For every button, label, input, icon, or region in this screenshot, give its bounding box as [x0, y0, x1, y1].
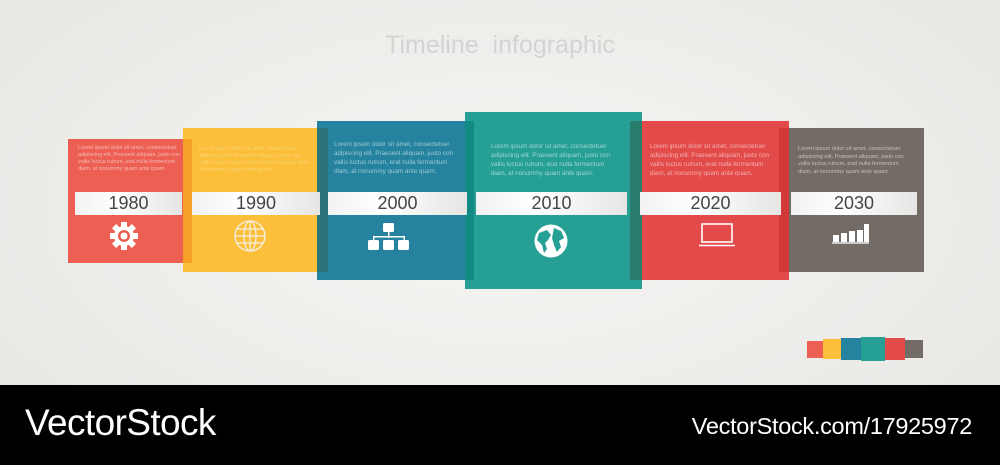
panel: 2020: [630, 121, 789, 280]
year: 1990: 1990: [236, 193, 276, 213]
legend swatches: [807, 337, 923, 361]
text: 1990: Lorem ipsum dolor sit amet, consectetuer adipiscing elit. Praesent aliquam, justo con vallis luctus rutrum, erat nulla fermentum diam, at nonummy quam ante quam.: [199, 146, 311, 173]
year: 2010: 2010: [531, 193, 572, 213]
text: 2030: Lorem ipsum dolor sit amet, consectetuer adipiscing elit. Praesent aliquam, justo con vallis luctus rutrum, erat nulla fermentum diam, at nonummy quam ante quam.: [798, 146, 904, 175]
icon: globe wire: [234, 220, 266, 252]
footer logo: VectorStock: [25, 402, 216, 443]
icon: gear: [110, 222, 138, 250]
icon: earth: [534, 224, 568, 258]
panel: 2010: [465, 112, 642, 289]
text: 2020: Lorem ipsum dolor sit amet, consectetuer adipiscing elit. Praesent aliquam, justo con vallis luctus rutrum, erat nulla fermentum diam, at nonummy quam ante quam.: [650, 143, 769, 177]
overlap strip: [317, 128, 328, 272]
footer bar: [0, 385, 1000, 465]
panel: 2000: [317, 121, 474, 280]
year: 1990: [192, 192, 320, 215]
panel: 1980: [68, 139, 192, 263]
text: 2000: Lorem ipsum dolor sit amet, consectetuer adipiscing elit. Praesent aliquam, justo con vallis luctus rutrum, erat nulla fermentum diam, at nonummy quam ante quam.: [334, 141, 453, 175]
year: 2010: [476, 192, 627, 215]
year: 2000: 2000: [377, 193, 418, 213]
year: 1980: 1980: [108, 193, 149, 213]
panel: 1990: [183, 128, 328, 272]
text: 2010: Lorem ipsum dolor sit amet, consectetuer adipiscing elit. Praesent aliquam, justo con vallis luctus rutrum, erat nulla fermentum diam, at nonummy quam ante quam.: [491, 143, 610, 177]
title: Timeline infographic: [385, 31, 615, 59]
overlap strip: [183, 139, 192, 263]
panel: 2030: [779, 128, 924, 272]
year: 2000: [328, 192, 467, 215]
year: 2020: [640, 192, 781, 215]
overlap strip: [779, 128, 789, 272]
icon: bar chart: [832, 224, 869, 244]
year: 2030: [791, 192, 917, 215]
year: 1980: [75, 192, 182, 215]
timeline: [68, 112, 924, 289]
icon: laptop: [699, 223, 735, 246]
year: 2020: 2020: [690, 193, 731, 213]
icon: org chart: [368, 223, 409, 250]
text: 1980: Lorem ipsum dolor sit amet, consectetuer adipiscing elit. Praesent aliquam, justo con vallis luctus rutrum, erat nulla fermentum diam, at nonummy quam ante quam.: [78, 145, 180, 172]
year: 2030: 2030: [834, 193, 874, 213]
overlap strips: [465, 121, 474, 280]
footer url: VectorStock.com/17925972: [692, 413, 972, 439]
